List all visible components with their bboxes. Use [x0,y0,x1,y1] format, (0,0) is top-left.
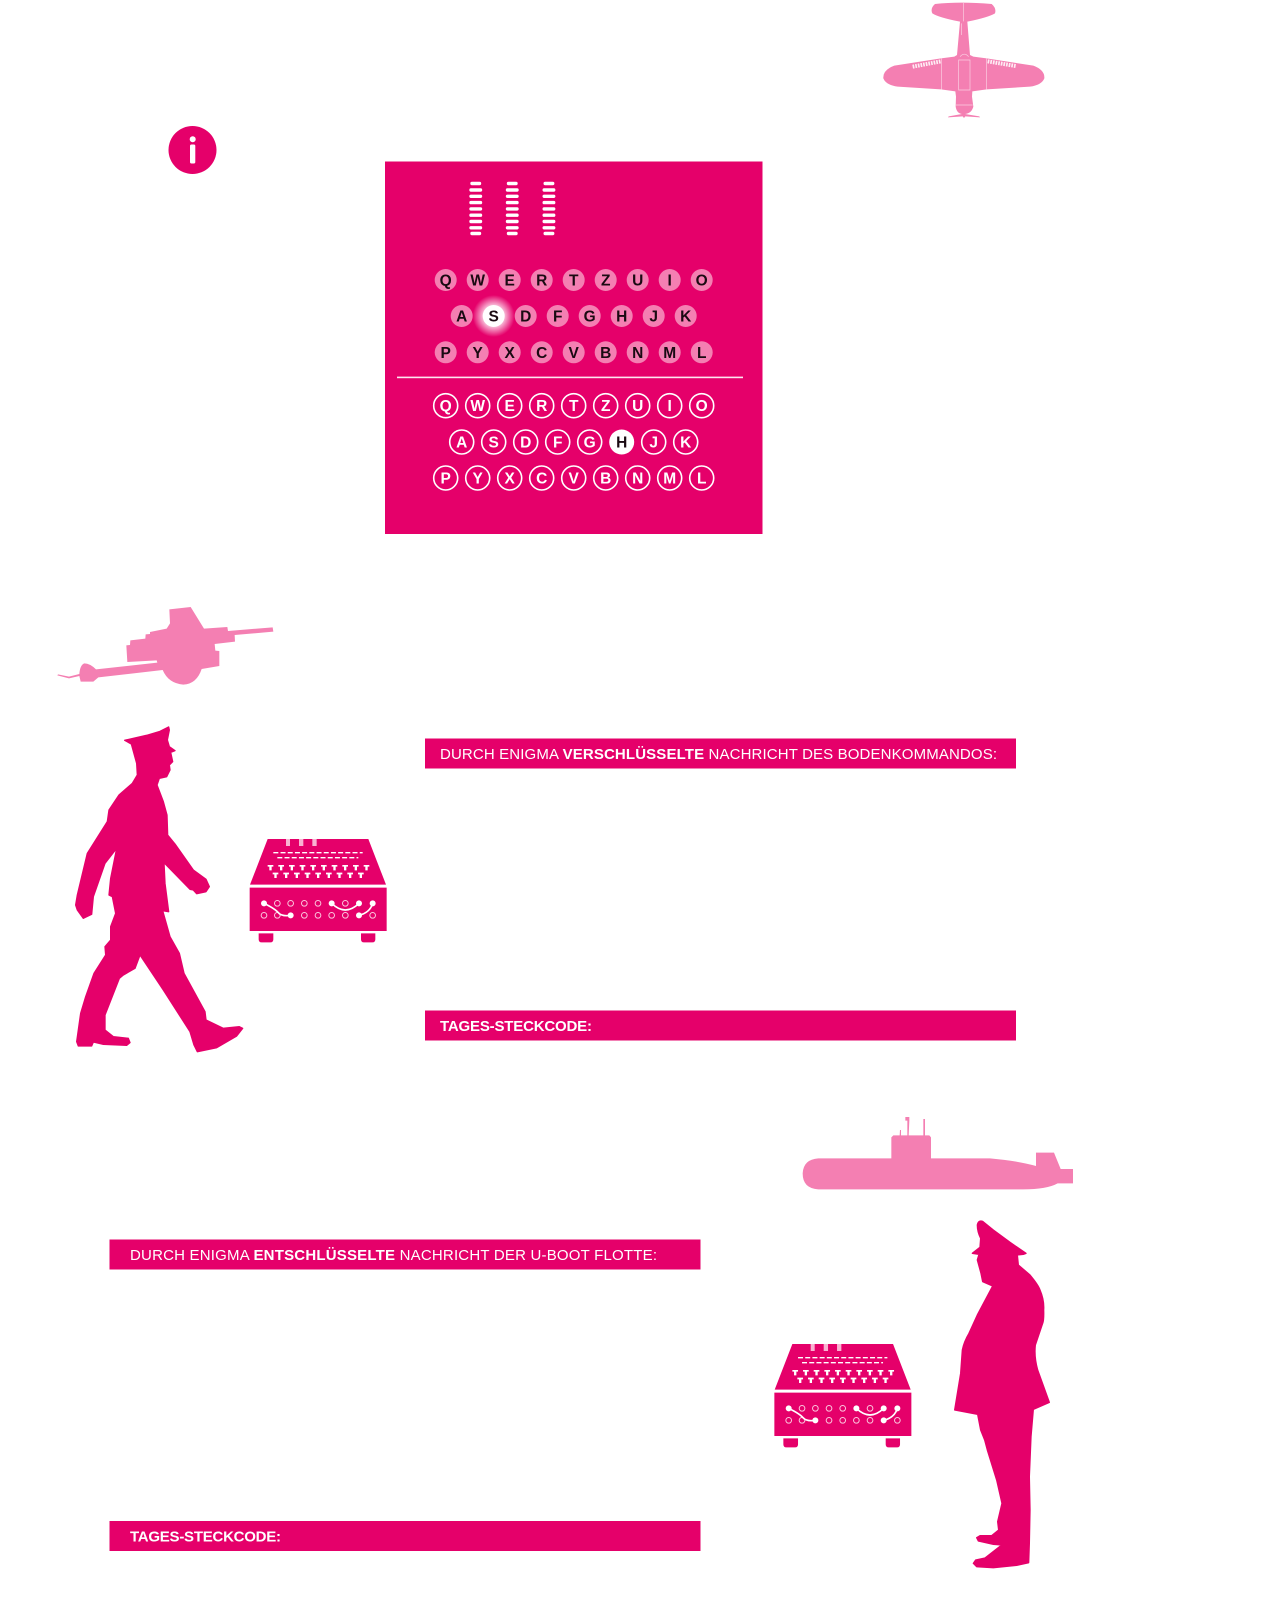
icon: enigma machine, receiver [774,1344,911,1447]
lampboard: S [489,434,499,452]
lampboard: O [696,398,708,415]
lampboard: X [505,470,516,488]
keyboard: A [456,308,467,326]
keyboard: M [663,345,676,362]
keyboard: H [616,308,627,326]
keyboard: D [520,308,531,326]
lampboard: E [505,398,515,415]
icon: submarine [803,1117,1073,1189]
keyboard: F [553,308,562,326]
keyboard: N [632,345,643,362]
icon: info [168,126,216,174]
keyboard: I [668,272,672,290]
keyboard: U [632,272,643,290]
lampboard: T [569,398,579,415]
heading bar: encrypted message: DURCH ENIGMA VERSCHLÜSSELTE NACHRICHT DES BODENKOMMANDOS: [440,746,997,763]
rotors [471,184,554,234]
keyboard: T [569,272,579,290]
heading bar: decrypted message: DURCH ENIGMA ENTSCHLÜSSELTE NACHRICHT DER U-BOOT FLOTTE: [130,1247,657,1264]
keyboard: Z [601,272,611,290]
keyboard: E [505,272,515,290]
keyboard: R [536,272,547,290]
lampboard: A [456,434,467,452]
lampboard: B [600,470,611,488]
heading bar: decrypted message [110,1240,700,1270]
lampboard: N [632,470,643,488]
lampboard: V [569,470,580,488]
figure: walking soldier [76,727,243,1052]
heading bar: daily plug code, ground: TAGES-STECKCODE: [440,1018,592,1035]
lampboard: P [441,470,451,488]
keyboard: P [441,345,451,362]
lampboard: F [553,434,562,452]
heading bar: daily plug code, submarine: TAGES-STECKCODE: [130,1528,281,1546]
keyboard: W [470,272,485,290]
keyboard: Q [440,272,452,290]
heading bar: encrypted message [425,738,1016,768]
lampboard: C [536,470,547,488]
lampboard: R [536,398,547,415]
keyboard: J [649,308,658,326]
lampboard: Q [440,398,452,415]
lampboard: G [584,434,596,452]
keyboard: S [489,308,499,326]
lampboard: W [470,398,485,415]
icon: enigma machine, sender [250,839,387,942]
icon: field gun [57,607,273,685]
icon: airplane [883,2,1044,118]
keyboard: Y [473,345,484,362]
keyboard: C [536,345,547,362]
figure: standing officer [955,1221,1049,1568]
lampboard: Z [601,398,611,415]
keyboard: V [569,345,580,362]
lampboard: H [616,434,627,452]
panel: enigma keyboard and lampboard [385,162,762,534]
keyboard: X [505,345,516,362]
keyboard: O [696,272,708,290]
lampboard: J [649,434,658,452]
heading bar: daily plug code, submarine [110,1521,700,1551]
keyboard: K [680,308,692,326]
lampboard: K [680,434,692,452]
keyboard: G [584,308,596,326]
heading bar: daily plug code, ground [425,1010,1016,1040]
lampboard: D [520,434,531,452]
lampboard: Y [473,470,484,488]
lampboard: M [663,470,676,488]
keyboard: L [697,345,706,362]
lampboard: L [697,470,706,488]
lampboard: U [632,398,643,415]
lampboard [434,394,714,490]
lampboard: I [668,398,672,415]
keyboard [435,269,713,363]
keyboard: B [600,345,611,362]
